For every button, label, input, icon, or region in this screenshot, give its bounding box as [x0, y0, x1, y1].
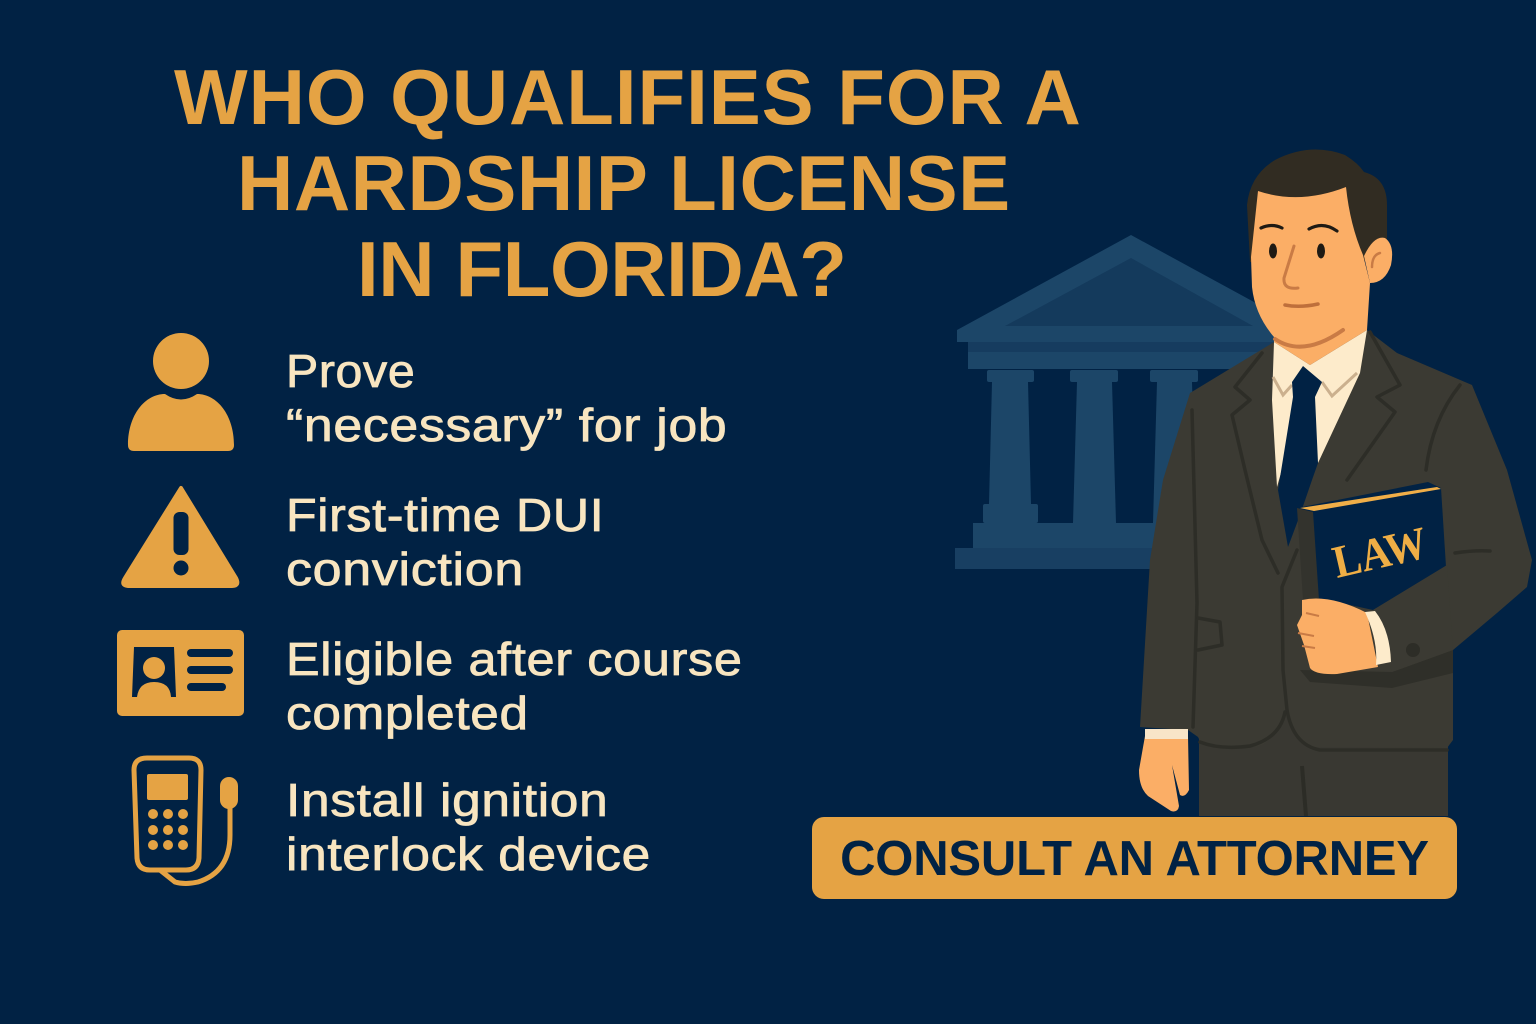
- text: eligible after course: completed: [286, 687, 529, 739]
- text: prove necessary: Prove: [286, 345, 415, 397]
- right hand: [1297, 599, 1378, 674]
- trousers: [1199, 700, 1448, 816]
- text: prove necessary: [286, 345, 727, 451]
- book: [1297, 482, 1446, 610]
- ear: [1364, 238, 1392, 283]
- left hand: [1139, 736, 1189, 811]
- text: eligible after course: Eligible after course: [286, 633, 743, 685]
- left cuff: [1145, 729, 1188, 739]
- jacket: [1140, 330, 1532, 748]
- tie: [1278, 366, 1322, 547]
- text: eligible after course: [286, 633, 743, 739]
- face details: [1269, 244, 1277, 258]
- text: prove necessary: “necessary” for job: [286, 399, 727, 451]
- icon: license card: [117, 630, 244, 716]
- text: first-time DUI: [286, 489, 604, 595]
- icon: warning triangle: [121, 486, 240, 588]
- button: consult an attorney: CONSULT AN ATTORNEY: [840, 832, 1429, 886]
- jacket shadow and seams: [1192, 332, 1490, 750]
- icon: courthouse: [955, 235, 1300, 569]
- right cuff: [1365, 611, 1391, 665]
- attorney figure: [1139, 150, 1532, 816]
- neck and face: [1251, 187, 1370, 365]
- title: [174, 53, 1082, 313]
- text: install ignition interlock: [286, 774, 651, 880]
- title: WHO QUALIFIES FOR A: [174, 53, 1082, 141]
- icon: interlock device: [132, 756, 238, 886]
- text: install ignition interlock: Install ignition: [286, 774, 608, 826]
- icon: person: [128, 333, 234, 451]
- attorney figure: LAW: [1328, 517, 1432, 588]
- button: consult an attorney: [812, 817, 1457, 899]
- text: install ignition interlock: interlock device: [286, 828, 651, 880]
- text: first-time DUI: conviction: [286, 543, 524, 595]
- hair: [1247, 150, 1387, 262]
- title: HARDSHIP LICENSE: [237, 139, 1011, 227]
- title: IN FLORIDA?: [357, 225, 847, 313]
- sleeve edge: [1373, 565, 1453, 672]
- text: first-time DUI: First-time DUI: [286, 489, 604, 541]
- shirt: [1272, 330, 1367, 487]
